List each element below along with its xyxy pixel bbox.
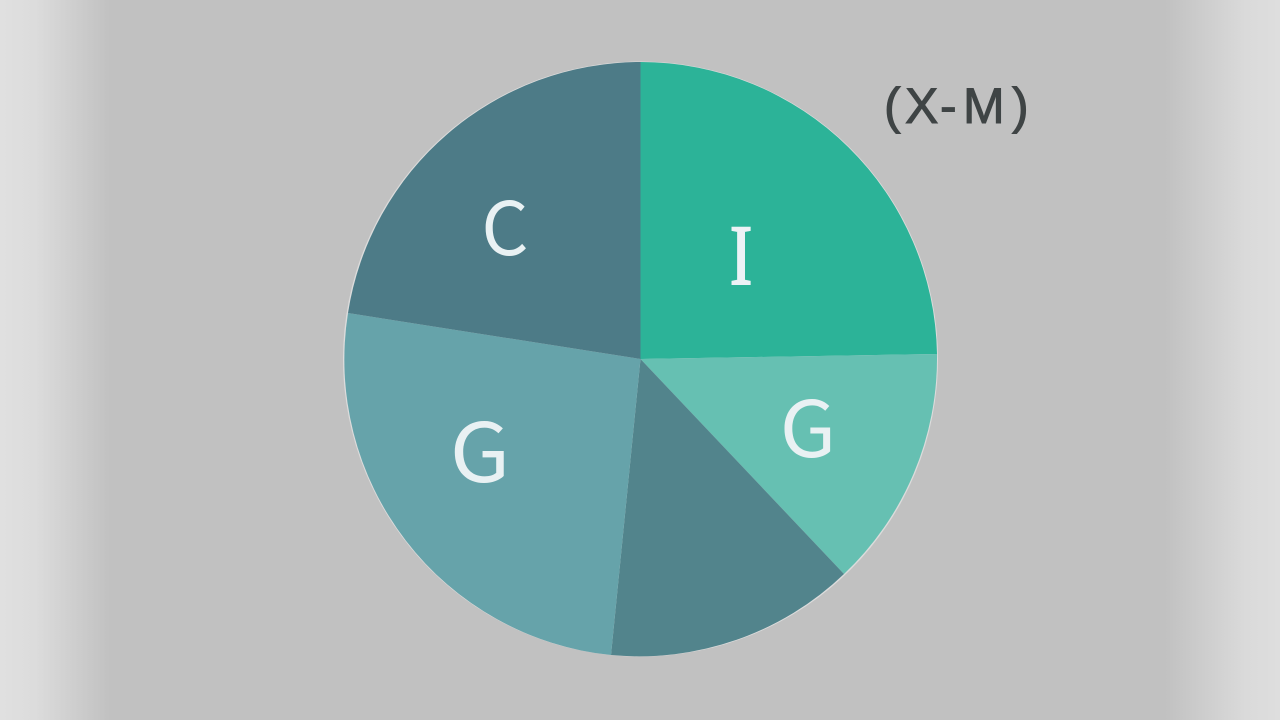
- slice: unlabeled: [611, 359, 844, 656]
- label: G right: G: [780, 367, 836, 480]
- slice: I: [640, 62, 937, 359]
- label: (X-M): (X-M): [884, 78, 1029, 134]
- label: I: I: [730, 207, 752, 303]
- pie chart: [343, 62, 938, 656]
- label: G left: G: [450, 388, 510, 506]
- slice: G: [344, 313, 640, 655]
- label: C: C: [481, 170, 529, 277]
- slice: G light: [640, 354, 937, 574]
- slice: C: [348, 62, 640, 359]
